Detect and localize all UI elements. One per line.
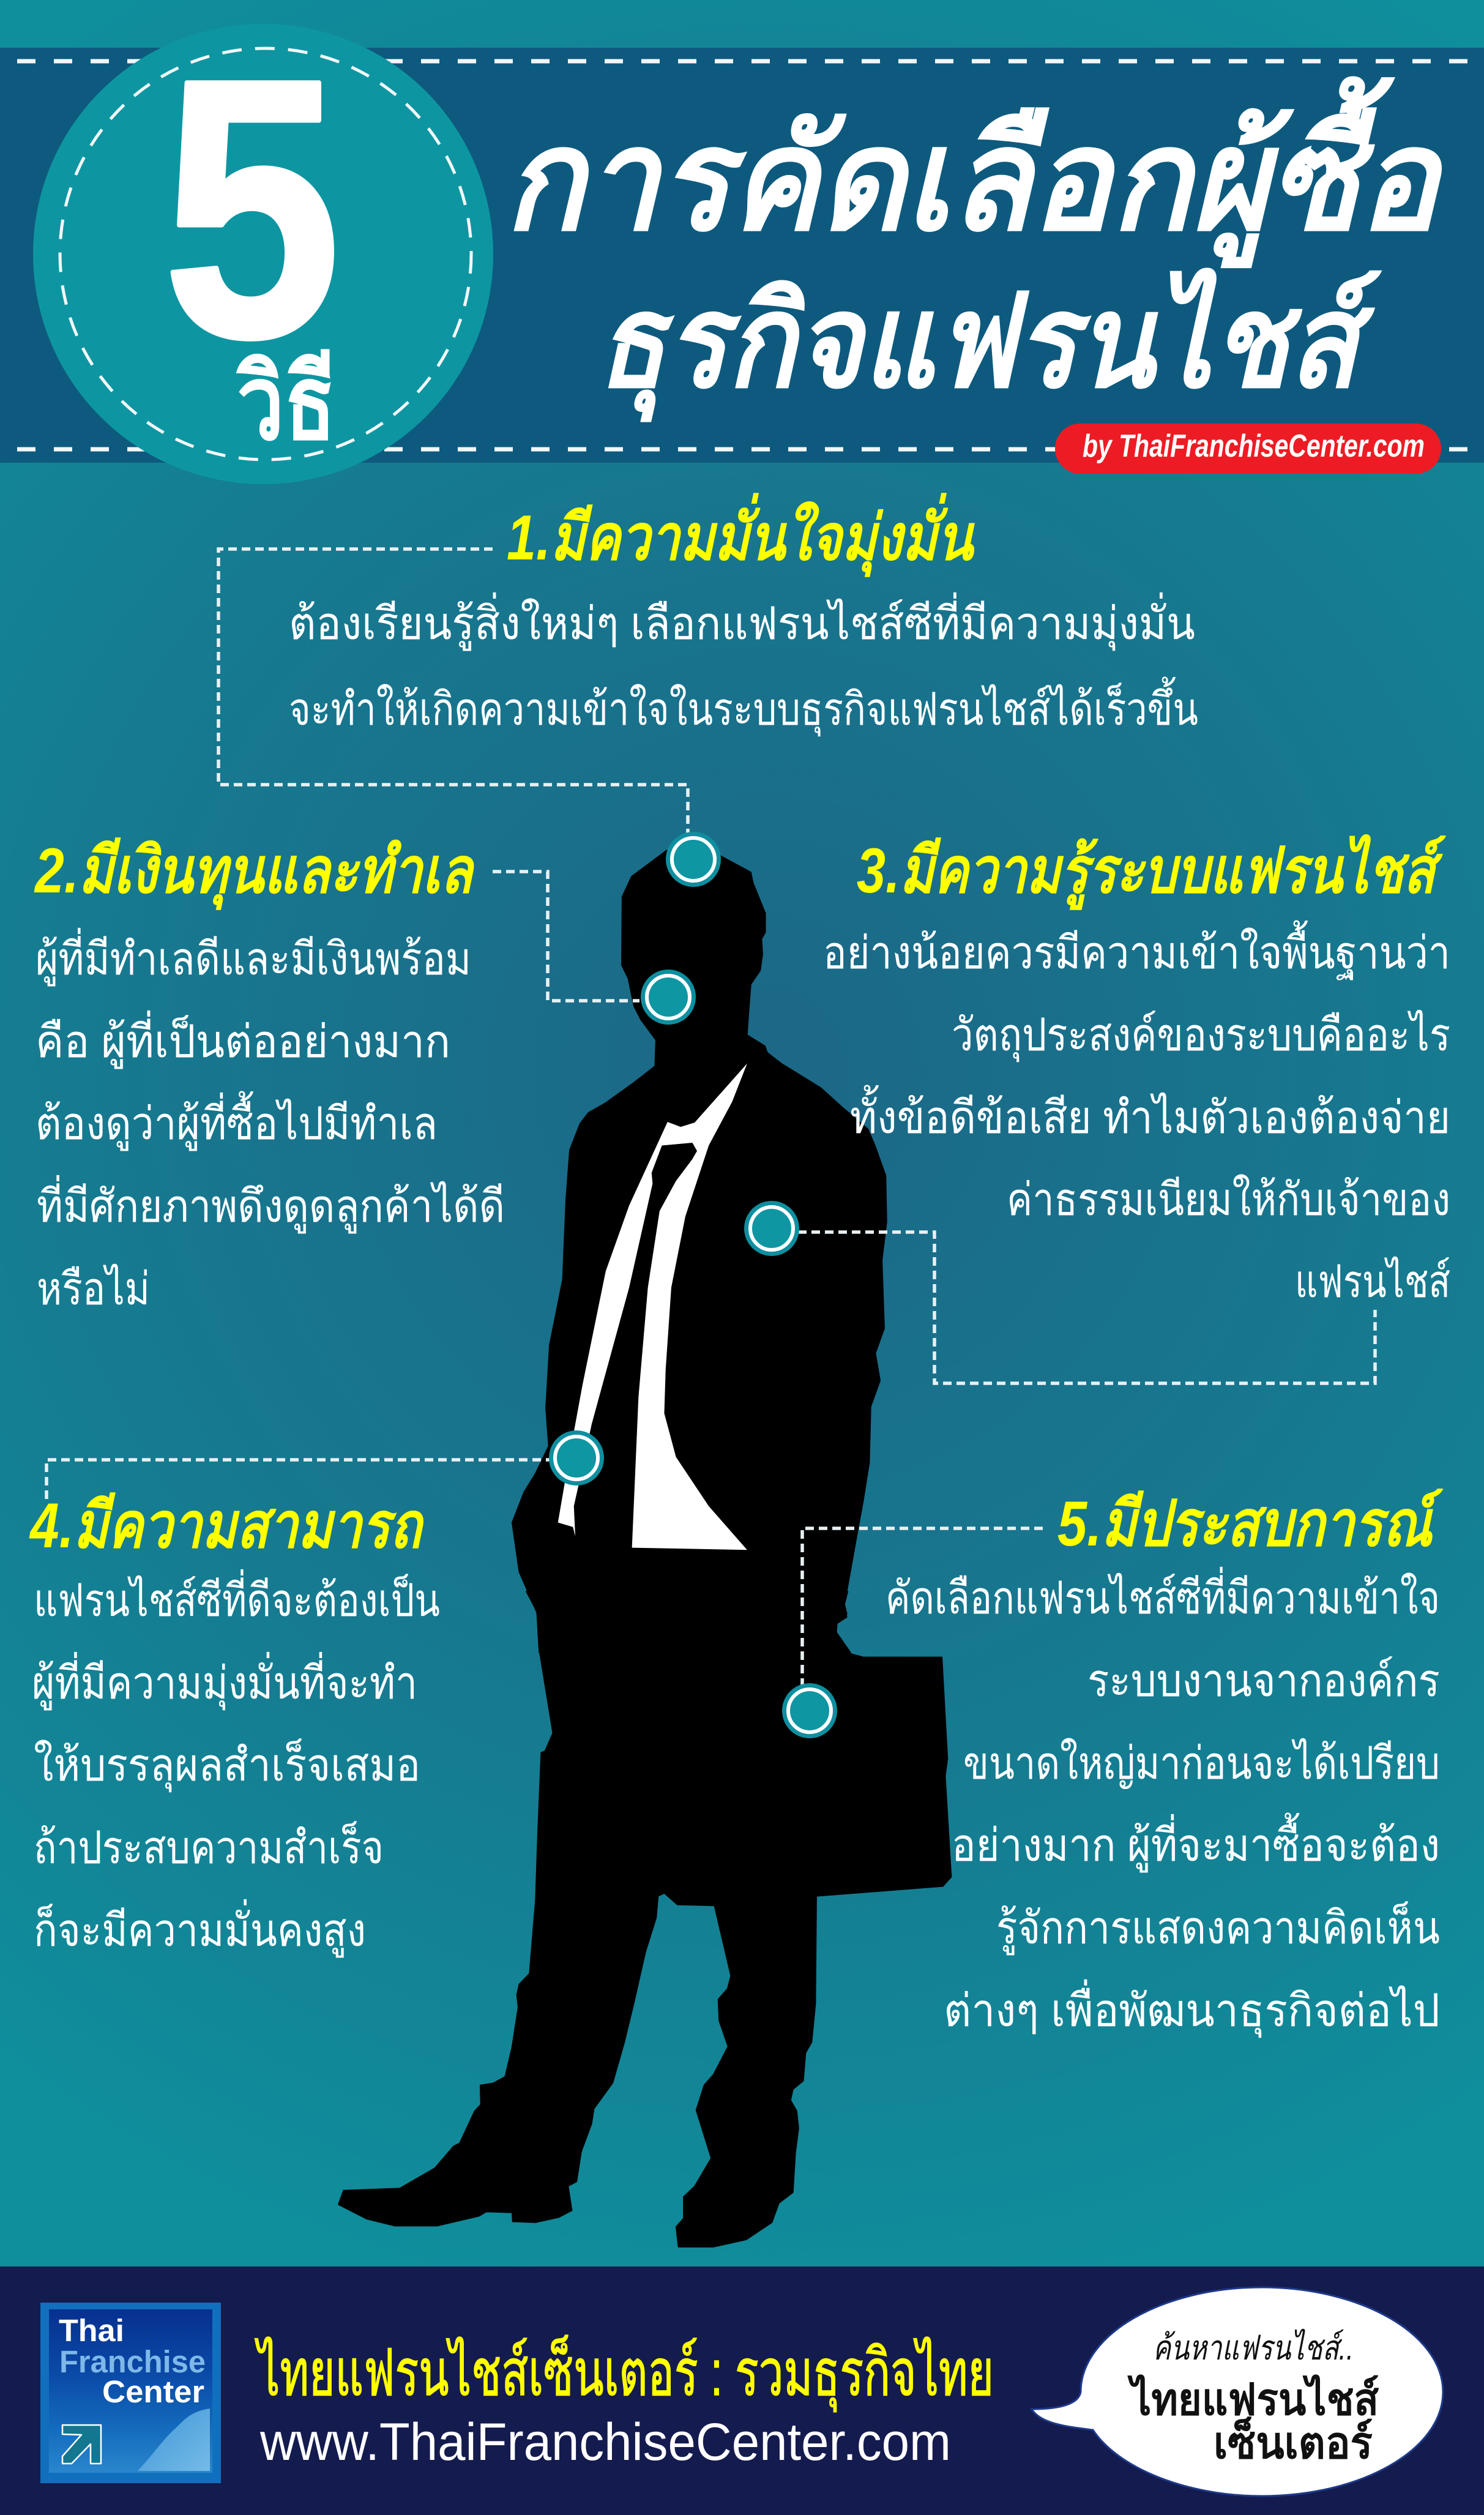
text block 4: ผู้ที่มีความมุ่งมั่นที่จะทำ: [32, 1651, 417, 1711]
footer url: www.ThaiFranchiseCenter.com: [259, 2413, 951, 2472]
heading 4: 4.มีความสามารถ: [29, 1490, 425, 1561]
label: ways: วิธี: [236, 345, 336, 462]
title: ธุรกิจแฟรนไชส์: [597, 267, 1382, 422]
logo: [40, 2303, 221, 2483]
marker: briefcase: [782, 1683, 837, 1738]
connector: point 4: [47, 1460, 551, 1499]
shirt: [558, 1064, 747, 1550]
text block 2: ที่มีศักยภาพดึงดูดลูกค้าได้ดี: [37, 1175, 505, 1234]
logo text: Center: [102, 2374, 204, 2409]
speech bubble: [1032, 2287, 1443, 2496]
text block 4: ให้บรรลุผลสำเร็จเสมอ: [34, 1739, 420, 1793]
connector: point 2: [493, 872, 639, 1001]
text block 2: [35, 927, 505, 1314]
badge: 5 ways circle: [33, 4, 493, 484]
marker: head: [666, 832, 721, 887]
text block 1: [289, 592, 1198, 737]
panel: point 4: [29, 1490, 440, 1958]
text block 4: แฟรนไชส์ซีที่ดีจะต้องเป็น: [34, 1569, 440, 1626]
marker: arm: [549, 1430, 604, 1485]
text block 5: ต่างๆ เพื่อพัฒนาธุรกิจต่อไป: [944, 1979, 1440, 2038]
logo text: Thai: [59, 2313, 124, 2348]
icon: wing: [138, 2408, 210, 2471]
marker: face: [641, 970, 696, 1025]
bubble name: ไทยแฟรนไชส์: [1127, 2374, 1379, 2424]
figure: businessman silhouette: [338, 850, 952, 2247]
text block 4: [32, 1569, 440, 1958]
credit pill: [1055, 424, 1441, 474]
marker: chest: [744, 1201, 799, 1256]
text block 2: ต้องดูว่าผู้ที่ซื้อไปมีทำเล: [35, 1091, 438, 1151]
logo text: Franchise: [59, 2344, 206, 2379]
panel: point 5: [886, 1489, 1444, 2038]
text block 5: ระบบงานจากองค์กร: [1087, 1655, 1440, 1706]
footer slogan: ไทยแฟรนไชส์เซ็นเตอร์ : รวมธุรกิจไทย: [255, 2334, 994, 2412]
heading 1: 1.มีความมั่นใจมุ่งมั่น: [507, 493, 975, 577]
number five: 5: [163, 4, 341, 414]
text block 2: ผู้ที่มีทำเลดีและมีเงินพร้อม: [35, 927, 471, 987]
text block 4: ถ้าประสบความสำเร็จ: [34, 1822, 384, 1873]
connector: point 5: [802, 1528, 1043, 1689]
text block 2: หรือไม่: [37, 1263, 150, 1314]
bubble name: เซ็นเตอร์: [1214, 2416, 1373, 2468]
connector: point 3: [798, 1232, 1375, 1383]
connector: point 1: [218, 549, 688, 835]
bubble name: [1127, 2374, 1379, 2468]
text block 5: [886, 1566, 1440, 2038]
bubble tagline: ค้นหาแฟรนไชส์..: [1153, 2328, 1354, 2367]
title: การคัดเลือกผู้ซื้อ: [504, 76, 1444, 269]
title: [504, 76, 1444, 422]
text block 2: คือ ผู้ที่เป็นต่ออย่างมาก: [35, 1010, 450, 1069]
logo text: [59, 2313, 206, 2409]
panel: point 3: [823, 834, 1450, 1307]
text block 5: อย่างมาก ผู้ที่จะมาซื้อจะต้อง: [952, 1812, 1440, 1873]
panel: footer: [0, 2266, 1484, 2515]
panel: point 1: [289, 493, 1198, 737]
panel: point 2: [34, 835, 505, 1314]
heading 2: 2.มีเงินทุนและทำเล: [34, 835, 475, 910]
text block 4: ก็จะมีความมั่นคงสูง: [34, 1899, 366, 1958]
panel: header band: [0, 48, 1484, 463]
text block 1: จะทำให้เกิดความเข้าใจในระบบธุรกิจแฟรนไชส์ได้เร็วขึ้น: [289, 676, 1198, 737]
icon: arrow: [62, 2425, 101, 2464]
text block 1: ต้องเรียนรู้สิ่งใหม่ๆ เลือกแฟรนไชส์ซีที่มีความมุ่งมั่น: [289, 592, 1195, 651]
text block 3: [823, 920, 1450, 1307]
